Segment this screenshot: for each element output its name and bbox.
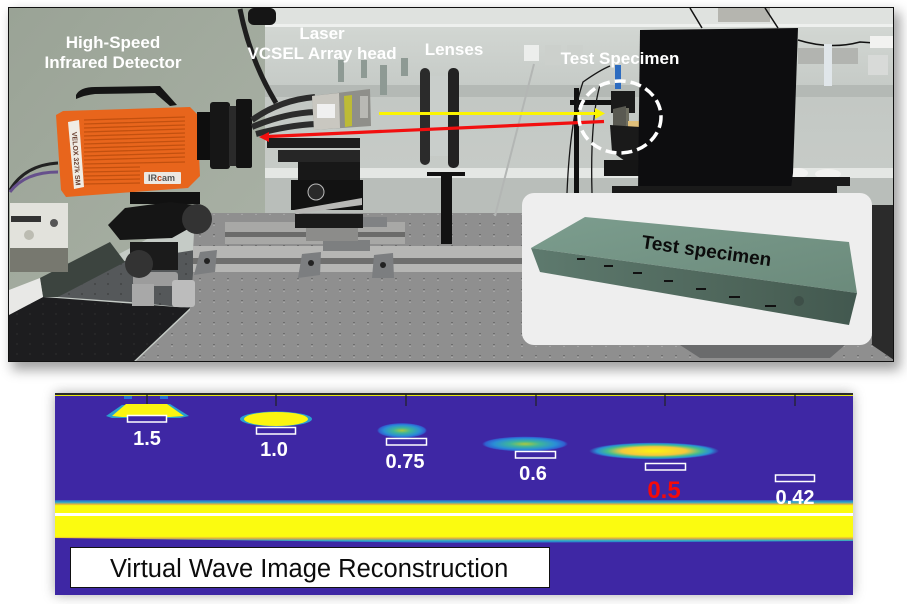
caption box bbox=[70, 548, 550, 588]
icon: laser VCSEL array head bbox=[312, 89, 371, 130]
scale ticks bbox=[147, 394, 795, 406]
controller box bbox=[10, 163, 68, 272]
defect 1.5: 1.5 bbox=[133, 428, 161, 450]
yellow beam arrow bbox=[379, 108, 605, 119]
black panel board bbox=[638, 28, 798, 192]
label: laser: VCSEL Array head bbox=[247, 44, 397, 63]
defect 0.42: 0.42 bbox=[776, 487, 814, 509]
panel: virtual wave image bbox=[55, 393, 853, 595]
label: detector: Infrared Detector bbox=[45, 53, 182, 72]
defect 0.75 bbox=[377, 423, 427, 473]
label: detector: High-Speed bbox=[66, 33, 160, 52]
dark table corner bbox=[58, 250, 195, 308]
defect 1.0: 1.0 bbox=[260, 439, 288, 461]
defect 0.75: 0.75 bbox=[386, 451, 424, 473]
defect 1.0 bbox=[240, 412, 312, 461]
wall fittings bbox=[338, 45, 583, 95]
icon: orange infrared camera: VELOX 327k SM bbox=[70, 132, 81, 186]
table surface bbox=[135, 213, 894, 362]
panel: laboratory setup photo bbox=[8, 7, 900, 370]
cable top-left bbox=[240, 9, 276, 103]
right cables and breaker bbox=[680, 8, 894, 360]
camera tripod head bbox=[108, 192, 212, 307]
icon: orange infrared camera bbox=[56, 86, 200, 197]
label: test specimen: Test Specimen bbox=[561, 49, 679, 68]
icon: orange infrared camera: IRcam bbox=[148, 173, 175, 183]
label: lenses: Lenses bbox=[425, 40, 483, 59]
defect 0.5: 0.5 bbox=[647, 477, 681, 504]
icon: lenses bbox=[420, 68, 465, 244]
yellow reflection band bbox=[55, 500, 853, 543]
cables to laser bbox=[252, 97, 316, 134]
defect 0.6: 0.6 bbox=[519, 463, 547, 485]
defect 0.5 bbox=[589, 442, 719, 504]
defect 0.42 bbox=[776, 475, 814, 509]
inset: test specimen block bbox=[522, 193, 872, 345]
black breadboard bbox=[8, 297, 190, 362]
red return beam arrow bbox=[259, 122, 604, 142]
dashed circle around specimen bbox=[579, 81, 661, 153]
defect 0.6 bbox=[482, 436, 568, 485]
defect 1.5 bbox=[106, 396, 189, 450]
inset: test specimen block: Test specimen bbox=[640, 232, 773, 271]
rails bbox=[193, 217, 523, 278]
specimen mount bbox=[567, 65, 642, 193]
icon: camera lens bbox=[197, 99, 252, 169]
label: laser: Laser bbox=[299, 24, 345, 43]
caption box: Virtual Wave Image Reconstruction bbox=[110, 555, 508, 583]
translation stage bbox=[267, 138, 363, 241]
